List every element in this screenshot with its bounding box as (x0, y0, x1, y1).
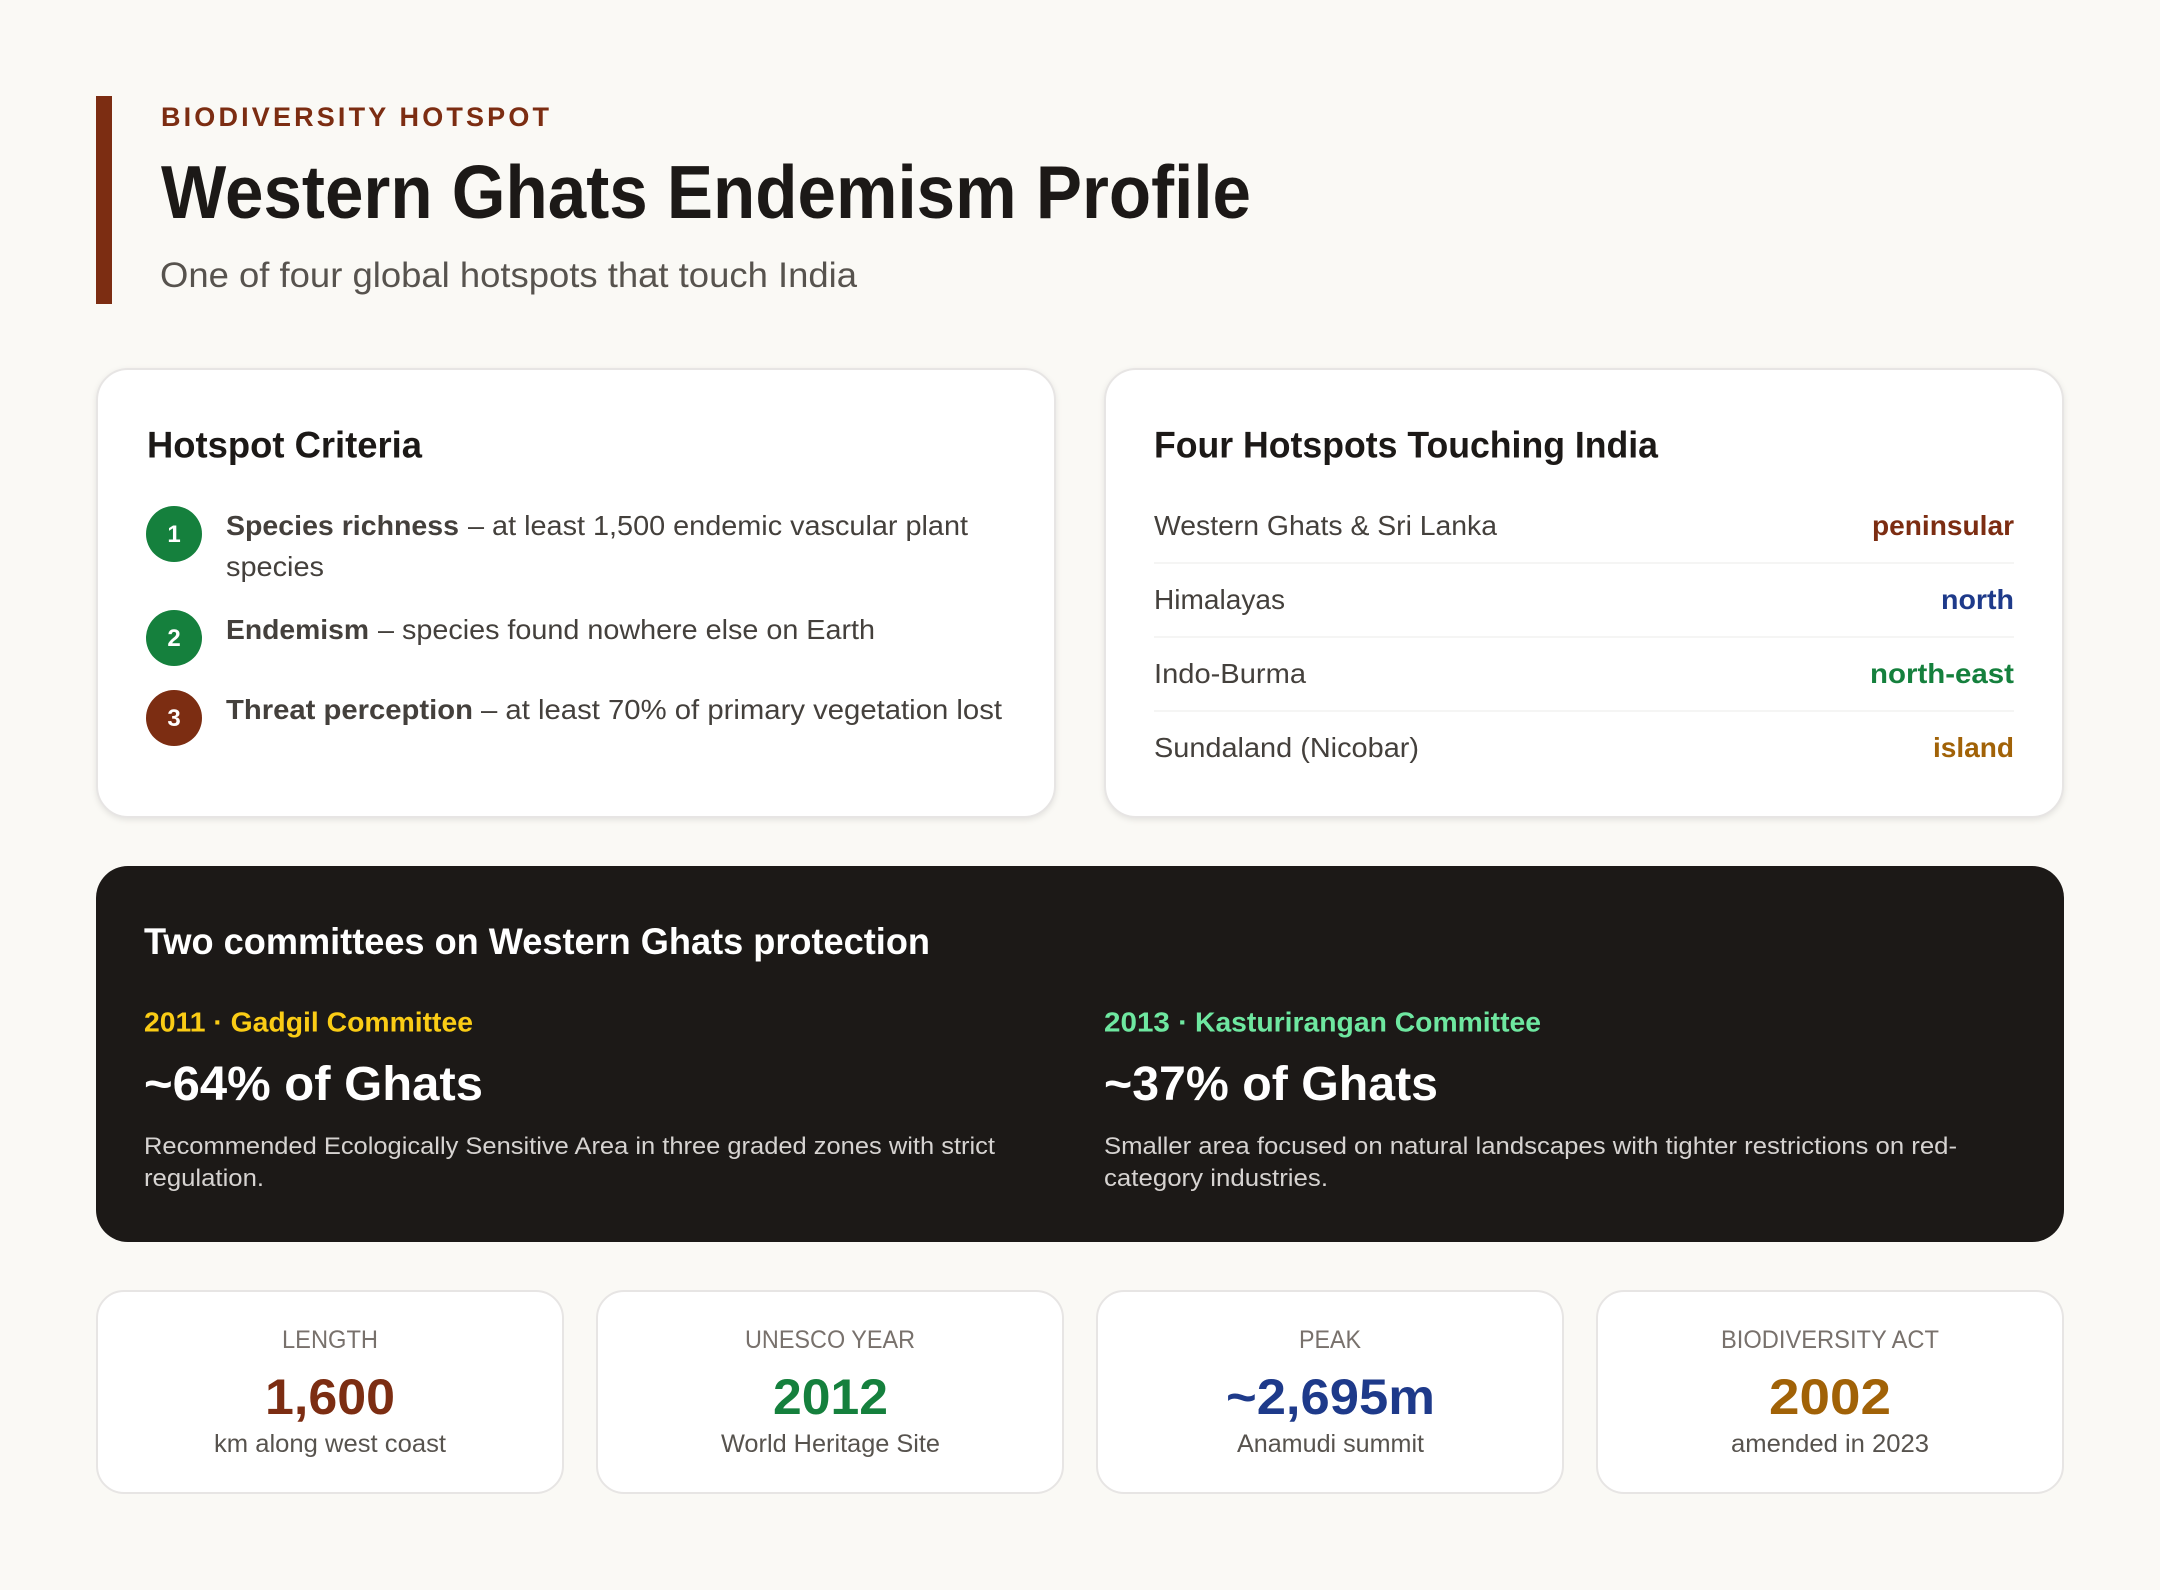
eyebrow label: BIODIVERSITY HOTSPOT (161, 102, 550, 132)
Kasturirangan description: category industries. (1104, 1165, 1328, 1192)
row: Sundaland (1154, 732, 2014, 763)
panel: hotspot criteria (97, 369, 1055, 817)
badge 1: 1 (167, 521, 181, 548)
dark background (96, 866, 2064, 1242)
Gadgil description (144, 1133, 995, 1192)
row: Himalayas: north (1941, 584, 2014, 615)
criterion 3 name: Threat perception (226, 694, 473, 725)
header (96, 96, 1251, 304)
Gadgil description: regulation. (144, 1165, 264, 1192)
row: Western Ghats and Sri Lanka: Western Ghats & Sri Lanka (1154, 510, 1497, 541)
row: Indo-Burma: north-east (1870, 658, 2014, 689)
criterion 3 text: – at least 70% of primary vegetation lost (481, 694, 1002, 725)
accent bar (96, 96, 112, 304)
heading: Hotspot Criteria (147, 424, 422, 466)
stat card: biodiversity act (1597, 1291, 2063, 1493)
value: 1,600 (265, 1369, 395, 1425)
panel: four hotspots touching India (1105, 369, 2063, 817)
stat card: peak (1097, 1291, 1563, 1493)
value: 2012 (773, 1369, 888, 1425)
criterion 1 text: – at least 1,500 endemic vascular plant (468, 510, 968, 541)
criterion 1 name: Species richness (226, 510, 459, 541)
Kasturirangan label: 2013 · (1104, 1006, 1188, 1038)
row: Himalayas: Himalayas (1154, 584, 1285, 615)
heading: Two committees on Western Ghats protection (144, 921, 930, 962)
criterion 1 (146, 506, 968, 582)
row: Western Ghats and Sri Lanka: peninsular (1872, 510, 2014, 541)
stat card: length (97, 1291, 563, 1493)
criterion 2 (146, 610, 875, 666)
Kasturirangan description: Smaller area focused on natural landscapes with tighter restrictions on red- (1104, 1133, 1957, 1160)
value: 2002 (1769, 1369, 1891, 1425)
panel: two committees (96, 866, 2064, 1242)
label: UNESCO YEAR (745, 1326, 915, 1354)
row: Western Ghats and Sri Lanka (1154, 510, 2014, 541)
column: Kasturirangan Committee (1104, 1006, 1957, 1192)
Gadgil description: Recommended Ecologically Sensitive Area in three graded zones with strict (144, 1133, 995, 1160)
badge 3: 3 (167, 705, 181, 732)
row: Sundaland: Sundaland (Nicobar) (1154, 732, 1419, 763)
caption: Anamudi summit (1237, 1430, 1424, 1458)
badge 2 (146, 610, 202, 666)
criterion 1 text, second line: species (226, 551, 324, 582)
badge 3 (146, 690, 202, 746)
label: PEAK (1299, 1326, 1361, 1354)
row: Himalayas (1154, 584, 2014, 615)
criterion 2 name: Endemism (226, 614, 369, 645)
caption: km along west coast (214, 1430, 446, 1458)
criterion 3 (146, 690, 1002, 746)
label: BIODIVERSITY ACT (1721, 1326, 1939, 1354)
Kasturirangan label: Kasturirangan Committee (1195, 1006, 1541, 1038)
row: Indo-Burma: Indo-Burma (1154, 658, 1306, 689)
title: Western Ghats Endemism Profile (161, 150, 1251, 234)
label: LENGTH (282, 1326, 378, 1354)
stat card: UNESCO year (597, 1291, 1063, 1493)
card background (97, 369, 1055, 817)
Kasturirangan description (1104, 1133, 1957, 1192)
row: Indo-Burma (1154, 658, 2014, 689)
Gadgil figure: ~64% of Ghats (144, 1058, 483, 1111)
row: Sundaland: island (1933, 732, 2014, 763)
heading: Four Hotspots Touching India (1154, 424, 1658, 466)
caption: amended in 2023 (1731, 1430, 1929, 1458)
column: Gadgil Committee (144, 1006, 995, 1192)
badge 1 (146, 506, 202, 562)
subtitle: One of four global hotspots that touch India (160, 256, 858, 295)
Gadgil label: 2011 · Gadgil Committee (144, 1006, 473, 1038)
card background (1105, 369, 2063, 817)
badge 2: 2 (167, 625, 181, 652)
Kasturirangan figure: ~37% of Ghats (1104, 1058, 1438, 1111)
value: ~2,695m (1226, 1369, 1435, 1425)
caption: World Heritage Site (721, 1430, 940, 1458)
criterion 2 text: – species found nowhere else on Earth (378, 614, 875, 645)
